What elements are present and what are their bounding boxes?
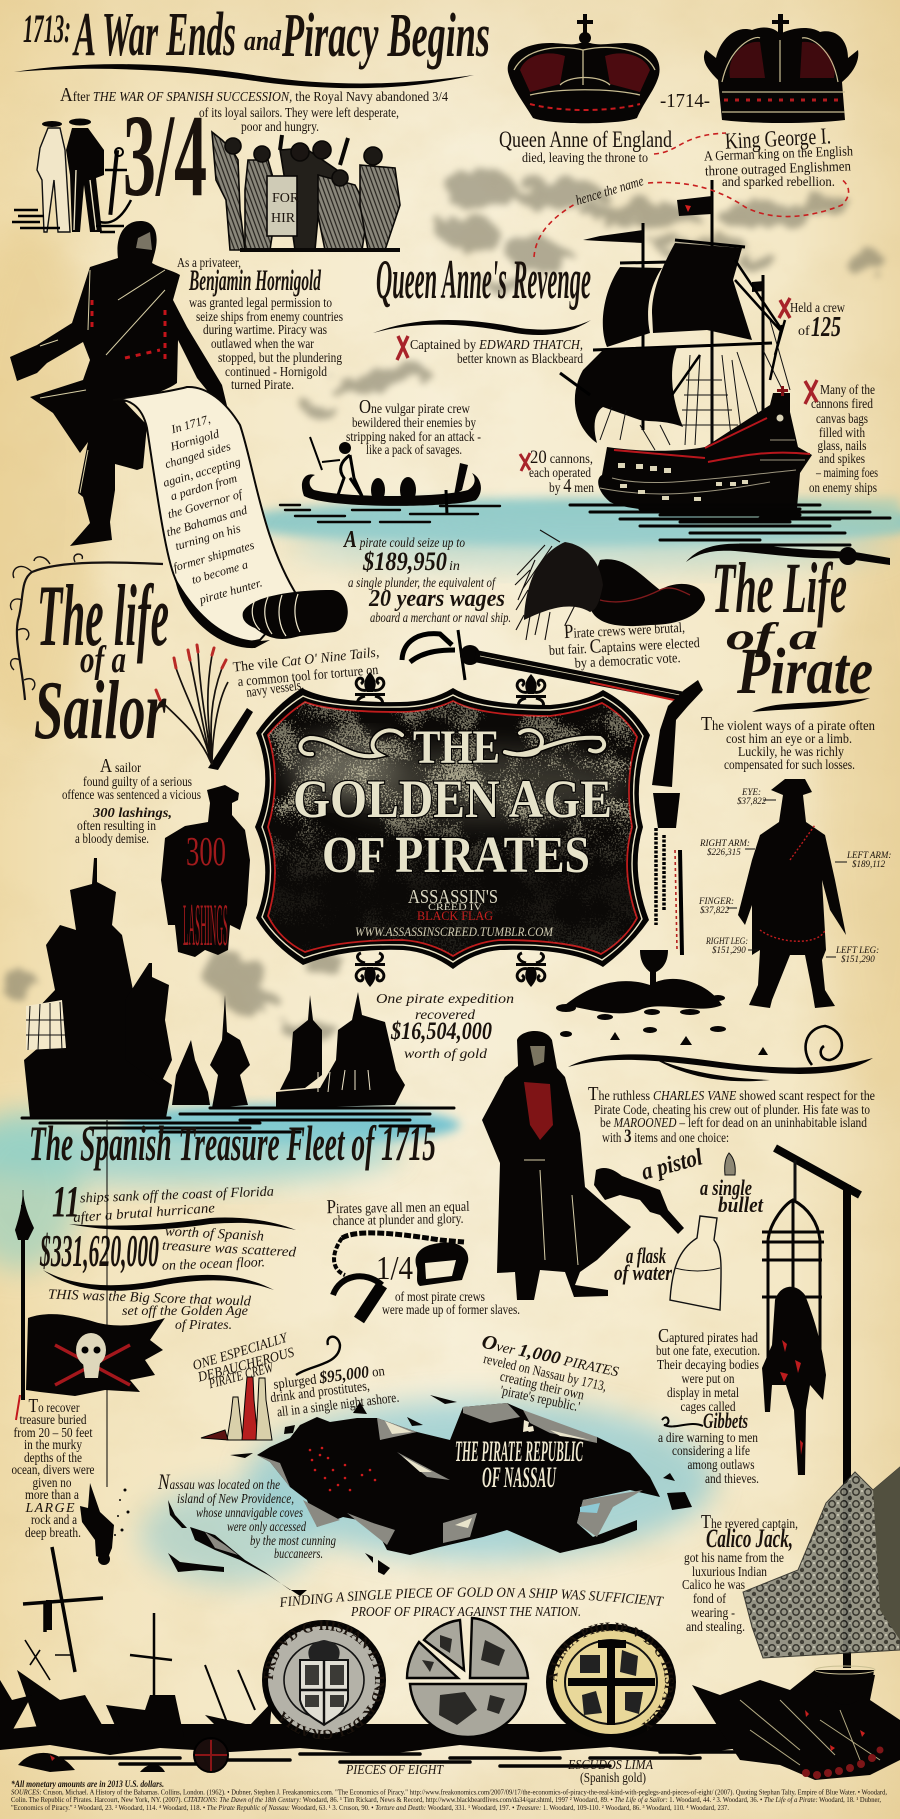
callout: held a crew of 125: 125	[811, 312, 841, 343]
text: former slaves	[382, 1290, 520, 1318]
icon: shackles with 1/4: 1/4	[376, 1250, 413, 1287]
text: King George I: King George I.	[724, 123, 832, 154]
text: vulgar pirate crew: like a pack of savages.	[366, 443, 462, 458]
illustration: sailors for hire: HIR	[271, 211, 296, 226]
footer: sources and citations: *All monetary amounts are in 2013 U.S. dollars.	[11, 1779, 164, 1789]
heading: The Life of a Pirate: Pirate	[736, 635, 873, 708]
panel: Hornigold biography: outlawed when the war	[211, 337, 314, 352]
text: captured pirates gibbets: cages called	[680, 1400, 736, 1415]
icon: diver	[80, 1483, 130, 1565]
callout: canvas bags: glass, nails	[818, 439, 866, 454]
heading: The life of a Sailor: of a	[80, 639, 126, 681]
text: Calico Jack: wearing -	[691, 1606, 735, 1621]
text: to recover treasure	[12, 1395, 94, 1541]
labels: price of body parts: $226,315	[707, 847, 741, 857]
text: captured pirates gibbets: display in metal	[667, 1386, 739, 1401]
text: Charles Vane marooned	[588, 1083, 875, 1147]
title: 1713	[14, 1, 490, 88]
panel: Golden Age sign: BLACK FLAG	[417, 908, 493, 923]
text: the Big Score: set off the Golden Age	[122, 1304, 248, 1319]
text: pirate could seize: A pirate could seize up to	[342, 527, 465, 553]
text: pirate could seize: 20 years wages	[368, 586, 505, 612]
callout: canvas bags: filled with	[819, 426, 865, 441]
text: Calico Jack	[682, 1511, 798, 1635]
clouds and sea washes	[0, 168, 900, 1585]
text: the Big Score: THIS was the Big Score that would	[48, 1287, 252, 1310]
callout: captained by Edward Thatch: Captained by EDWARD THATCH,	[410, 338, 583, 353]
text: over 1000 pirates: reveled on Nassau by 1713,	[482, 1352, 608, 1395]
scroll: In 1717,	[169, 412, 212, 437]
text: single piece of gold	[280, 1588, 664, 1620]
big fraction 3/4: 3/4	[123, 90, 207, 221]
labels: price of body parts: EYE:	[741, 787, 761, 797]
text: vulgar pirate crew: One vulgar pirate crew	[359, 396, 471, 418]
map: Pirate Republic of Nassau	[230, 1395, 692, 1575]
text: Calico Jack: Calico he was	[682, 1578, 745, 1593]
text: captured pirates gibbets: Their decaying bodies	[657, 1358, 759, 1373]
figure: Benjamin Hornigold	[10, 221, 228, 546]
text: cat o' nine tails: The vile Cat O' Nine Tails,	[232, 645, 380, 676]
scroll: turning on his	[173, 521, 242, 553]
text: violent ways: Luckily, he was richly	[738, 745, 844, 760]
text: pirate expedition: recovered	[415, 1008, 476, 1023]
text: war of Spanish succession	[60, 84, 448, 135]
panel: Hornigold biography: was granted legal permission to	[189, 296, 332, 311]
text: Queen Anne's Revenge	[376, 249, 591, 311]
panel: Golden Age sign	[250, 688, 660, 970]
text: captured pirates gibbets: Gibbets	[703, 1408, 748, 1433]
title: 1713: Piracy Begins	[281, 2, 490, 70]
coin captions: PIECES OF EIGHT	[345, 1763, 444, 1778]
text: King George I: throne outraged Englishmen	[705, 159, 851, 180]
text: captured pirates gibbets	[656, 1325, 760, 1487]
text: pirate expedition: One pirate expedition	[376, 992, 514, 1007]
text: former slaves: were made up of former slaves.	[382, 1303, 520, 1318]
text: equal chance: Pirates gave all men an equal	[326, 1194, 470, 1218]
text: vulgar pirate crew: bewildered their enemies by	[352, 416, 476, 431]
scroll: former shipmates	[172, 538, 256, 574]
illustration: sailors for hire	[212, 132, 400, 250]
icon: cut coin pieces	[407, 1618, 528, 1737]
callout: 20 cannons: each operated	[529, 466, 591, 481]
text: eleven ships: 11	[52, 1177, 80, 1226]
labels: price of body parts: LEFT LEG:	[835, 945, 879, 955]
text: Nassau location	[157, 1469, 336, 1562]
map: Pirate Republic of Nassau: THE PIRATE REPUBLIC	[455, 1435, 583, 1468]
panel: Golden Age sign: OF PIRATES	[322, 827, 590, 884]
text: to recover treasure: treasure buried	[20, 1413, 86, 1428]
ornaments below sign	[355, 953, 546, 987]
text: 300 lashes: found guilty of a serious	[83, 775, 192, 790]
text: to recover treasure: deep breath.	[25, 1526, 81, 1541]
icon: shackles with 1/4	[333, 1233, 468, 1320]
text: 331 million: $331,620,000	[40, 1225, 159, 1276]
text: Calico Jack: fond of	[693, 1592, 726, 1607]
panel: Hornigold biography: stopped, but the plundering	[218, 351, 342, 366]
callout: 20 cannons: 20 cannons,	[530, 447, 593, 468]
text: King George I	[704, 123, 853, 190]
text: pirate could seize: a single plunder, the equivalent of	[348, 576, 497, 591]
text: Queen Anne of England: Queen Anne of England	[499, 127, 672, 152]
calico fabric	[743, 1467, 900, 1658]
map: New Providence isles	[168, 1500, 307, 1596]
footer: sources and citations	[11, 1779, 887, 1812]
scroll: to become a	[190, 557, 250, 587]
text: Nassau location: whose unnavigable coves	[196, 1506, 303, 1521]
scroll	[113, 387, 348, 648]
text: debaucherous crew: drink and prostitutes,	[270, 1379, 371, 1406]
text: pirate crews brutal: but fair. Captains were elected	[548, 630, 700, 660]
text: 331 million: on the ocean floor.	[162, 1255, 265, 1274]
title: 1713: A War Ends	[72, 1, 236, 69]
callout: canvas bags: on enemy ships	[809, 481, 877, 496]
icon: bottles	[201, 1377, 272, 1440]
shipwreck ground	[0, 1547, 900, 1772]
title: 1713: and	[244, 26, 282, 57]
heading: The Life of a Pirate	[712, 548, 873, 712]
text: Charles Vane marooned: The ruthless CHARLES VANE showed scant respect for the	[588, 1083, 875, 1105]
scroll: a pardon from	[169, 471, 239, 503]
text: pirate could seize: in	[449, 559, 460, 574]
panel: Golden Age sign: GOLDEN AGE	[293, 769, 612, 829]
scroll: changed sides	[163, 439, 232, 471]
illustration: Queen Anne's Revenge ship	[560, 180, 890, 545]
text: Calico Jack: Calico Jack,	[706, 1524, 793, 1553]
labels: price of body parts	[698, 787, 891, 964]
scroll: pirate hunter.	[197, 575, 264, 607]
treasure pile bottom right	[692, 1666, 900, 1780]
text: captured pirates gibbets: among outlaws	[688, 1458, 754, 1473]
illustration: sailors for hire: FOR	[272, 191, 300, 206]
text: 300 lashes: a bloody demise.	[75, 832, 149, 847]
text: to recover treasure: ocean, divers were	[12, 1463, 94, 1478]
text: eleven ships: ships sank off the coast of Florida	[80, 1185, 274, 1206]
text: captured pirates gibbets: were put on	[682, 1372, 734, 1387]
text: Calico Jack: luxurious Indian	[692, 1565, 767, 1580]
text: pirate expedition: worth of gold	[404, 1047, 488, 1062]
illustration: treasure fleet	[22, 858, 454, 1132]
figure: tattooed treasure pirate	[738, 779, 846, 1008]
text: over 1000 pirates: Over 1,000 PIRATES	[480, 1331, 621, 1381]
labels: price of body parts: $151,290	[841, 954, 875, 964]
footer: sources and citations: "Economics of Piracy." ² Woodard, 23. ³ Woodard, 114. ⁴ Woodard, 118. • The Pirate Republic of Nassau: Woodard, 63. ¹ 3. Cruson, 90. • Torture and Death: Woodard, 331. ¹ Woodard, 197. • Treasure: 1. Woodard, 109-110. ² Woodard, 86. ³ Woodard, 110. ⁴ Woodard, 237.	[11, 1803, 729, 1812]
text: 331 million: treasure was scattered	[162, 1239, 297, 1261]
text: war of Spanish succession: After THE WAR OF SPANISH SUCCESSION, the Royal Navy abandoned 3/4	[60, 84, 448, 106]
text: captured pirates gibbets: considering a life	[672, 1444, 750, 1459]
text: vulgar pirate crew	[346, 396, 481, 458]
text: the Big Score: of Pirates.	[175, 1318, 232, 1333]
text: over 1000 pirates	[480, 1331, 621, 1415]
icon: two sailors and anchor	[12, 118, 131, 232]
text: Nassau location: buccaneers.	[274, 1547, 323, 1562]
figure: whipped sailor: 300	[186, 829, 226, 874]
text: pirate crews brutal: by a democratic vote.	[574, 651, 681, 672]
text: pirate crews brutal	[547, 614, 701, 673]
panel: Golden Age sign: CREED IV	[428, 903, 482, 913]
icon: feathered hat	[515, 530, 705, 640]
panel: Golden Age sign: THE	[413, 721, 500, 774]
text: to recover treasure: in the murky	[24, 1438, 82, 1453]
text: to recover treasure: from 20 – 50 feet	[14, 1426, 93, 1441]
text: war of Spanish succession: poor and hungry.	[241, 120, 319, 135]
map: Pirate Republic of Nassau: OF NASSAU	[482, 1461, 557, 1494]
text: debaucherous crew: splurged $95,000 on	[272, 1360, 386, 1393]
text: The life	[37, 568, 169, 665]
text: over 1000 pirates: 'pirate's republic.'	[499, 1384, 581, 1415]
text: pirate could seize: aboard a merchant or naval ship.	[370, 611, 511, 626]
sword across sign	[402, 630, 703, 787]
text: captured pirates gibbets: and thieves.	[705, 1472, 759, 1487]
labels: price of body parts: $151,290	[712, 945, 746, 955]
text: single piece of gold: FINDING A SINGLE PIECE OF GOLD ON A SHIP WAS SUFFICIENT	[280, 1588, 664, 1607]
text: over 1000 pirates: creating their own	[498, 1370, 585, 1403]
panel: Golden Age sign: ASSASSIN'S	[408, 886, 498, 908]
panel: Hornigold biography: As a privateer,	[177, 256, 241, 271]
callout: captained by Edward Thatch: better known as Blackbeard	[457, 352, 583, 367]
swash with curl	[568, 1054, 873, 1081]
panel: Hornigold biography: seize ships from enemy countries	[196, 310, 343, 325]
label: 1714: -1714-	[660, 90, 710, 112]
callout: held a crew of 125: of	[798, 324, 810, 339]
text: Nassau location: island of New Providence,	[177, 1492, 294, 1507]
text: debaucherous crew: ONE ESPECIALLY	[191, 1330, 291, 1374]
text: to recover treasure: depths of the	[24, 1451, 82, 1466]
text: 331 million: worth of Spanish	[165, 1224, 264, 1245]
text: 300 lashes	[62, 755, 201, 847]
items: pistol, bullet, flask: a single	[700, 1175, 752, 1200]
text: to recover treasure: more than a	[25, 1488, 80, 1503]
text: pirate could seize	[342, 527, 511, 626]
text: pirate expedition: $16,504,000	[390, 1018, 492, 1045]
callout: canvas bags: canvas bags	[816, 412, 868, 427]
text: the Big Score	[48, 1287, 252, 1333]
text: Nassau location: Nassau was located on the	[157, 1469, 280, 1494]
text: captured pirates gibbets: a dire warning to men	[658, 1431, 758, 1446]
text: captured pirates gibbets: but one fate, execution.	[656, 1344, 760, 1359]
coin captions: (Spanish gold)	[580, 1771, 646, 1786]
text: cat o' nine tails: a common tool for torture on	[237, 663, 379, 690]
text: eleven ships: after a brutal hurricane	[73, 1201, 215, 1226]
labels: price of body parts: RIGHT ARM:	[699, 838, 750, 848]
text: violent ways	[701, 713, 875, 773]
text: debaucherous crew: PIRATE CREW	[207, 1360, 276, 1392]
items: pistol, bullet, flask: a pistol	[639, 1144, 706, 1186]
ornaments above sign	[355, 672, 546, 708]
text: debaucherous crew: all in a single night ashore.	[276, 1391, 400, 1420]
callout: captained by Edward Thatch	[397, 336, 583, 367]
text: cat o' nine tails: navy vessels.	[245, 678, 305, 701]
text: pirate crews brutal: Pirate crews were brutal,	[563, 615, 685, 643]
items: pistol, bullet, flask	[594, 1144, 764, 1310]
text: single piece of gold: PROOF OF PIRACY AGAINST THE NATION.	[350, 1605, 581, 1620]
text: to recover treasure: rock and a	[31, 1513, 78, 1528]
scroll: Hornigold	[168, 426, 222, 454]
red dashed route: hence the name	[534, 133, 849, 257]
text: equal chance	[326, 1194, 470, 1229]
icon: crown of Queen Anne	[508, 14, 660, 123]
panel: Hornigold biography	[177, 256, 343, 393]
text: Queen Anne of England: died, leaving the throne to	[522, 151, 648, 166]
heading: Queen Anne's Revenge	[373, 249, 591, 335]
text: eleven ships	[52, 1177, 296, 1230]
gibbet with cage	[762, 1148, 860, 1668]
labels: price of body parts: FINGER:	[698, 896, 734, 906]
goblet, beads and coin hoard	[556, 793, 768, 1055]
text: violent ways: compensated for such losses.	[724, 758, 855, 773]
text: pirate expedition	[376, 992, 514, 1062]
items: pistol, bullet, flask: of water	[614, 1260, 672, 1285]
callout: canvas bags: cannons fired	[811, 397, 873, 412]
labels: price of body parts: $37,822	[700, 905, 730, 915]
icon: crown of King George	[704, 14, 858, 123]
items: pistol, bullet, flask: bullet	[718, 1192, 764, 1217]
curl of swash	[806, 1026, 842, 1065]
panel: Golden Age sign: WWW.ASSASSINSCREED.TUMBLR.COM	[355, 925, 554, 939]
text: 300 lashes: often resulting in	[77, 819, 156, 834]
text: cat o' nine tails	[232, 645, 380, 701]
text: to recover treasure: LARGE	[24, 1501, 75, 1516]
labels: price of body parts: $189,112	[852, 859, 886, 869]
figure: whipped sailor	[161, 785, 250, 959]
icon: cutlass	[686, 544, 890, 565]
title: 1713: 1713:	[23, 6, 71, 51]
callout: held a crew of 125: Held a crew	[790, 301, 846, 316]
text: 300 lashes: offence was sentenced a vicious	[62, 788, 201, 803]
vine ornament	[10, 554, 163, 700]
heading: The life of a Sailor: Sailor	[34, 664, 167, 757]
illustration: canoe of naked pirates	[280, 437, 500, 522]
text: 300 lashes: A sailor	[100, 755, 141, 777]
scroll: the Governor of	[166, 486, 245, 521]
heading: Spanish Treasure Fleet of 1715: The Spanish Treasure Fleet of 1715	[29, 1115, 436, 1171]
scroll: the Bahamas and	[165, 503, 250, 539]
text: captured pirates gibbets: Captured pirates had	[658, 1325, 758, 1347]
jolly roger flag with pole	[15, 1120, 165, 1487]
text: vulgar pirate crew: stripping naked for an attack -	[346, 430, 481, 445]
heading: The Life of a Pirate: of a	[726, 616, 818, 658]
text: 300 lashes: 300 lashings,	[92, 806, 172, 821]
scroll: again, accepting	[161, 454, 242, 490]
items: pistol, bullet, flask: a flask	[626, 1243, 666, 1268]
panel: Hornigold biography: continued - Hornigold	[225, 365, 327, 380]
text: King George I: A German king on the English	[704, 144, 853, 165]
icon: cat o' nine tails	[156, 645, 253, 770]
text: Nassau location: were only accessed	[227, 1520, 307, 1535]
coin captions	[345, 1758, 653, 1786]
text: debaucherous crew: DEBAUCHEROUS	[196, 1345, 296, 1386]
figure: whipped sailor: LASHINGS	[183, 892, 228, 959]
panel: Hornigold biography: during wartime. Piracy was	[203, 323, 327, 338]
text: King George I: and sparked rebellion.	[722, 175, 835, 190]
labels: price of body parts: $37,822	[737, 796, 767, 806]
text: to recover treasure: To recover	[28, 1395, 80, 1417]
heading: The life of a Sailor	[34, 568, 169, 757]
callout: canvas bags	[805, 380, 878, 496]
callout: 20 cannons: by 4 men	[549, 475, 594, 497]
text: former slaves: of most pirate crews	[395, 1290, 485, 1305]
text: Calico Jack: and stealing.	[686, 1620, 745, 1635]
text: equal chance: chance at plunder and glory.	[332, 1212, 464, 1229]
callout: canvas bags: and spikes	[819, 452, 865, 467]
text: violent ways: The violent ways of a pirate often	[701, 713, 875, 735]
panel: Hornigold biography: turned Pirate.	[231, 378, 294, 393]
text: Nassau location: by the most cunning	[250, 1534, 336, 1549]
text: Charles Vane marooned: with 3 items and one choice:	[602, 1126, 729, 1147]
coin captions: ESCUDOS LIMA	[567, 1758, 653, 1773]
text: war of Spanish succession: of its loyal sailors. They were left desperate,	[199, 106, 399, 121]
text: to recover treasure: given no	[32, 1476, 72, 1491]
labels: price of body parts: LEFT ARM:	[846, 850, 891, 860]
callout: held a crew of 125	[779, 298, 846, 343]
panel: Hornigold biography: Benjamin Hornigold	[188, 264, 322, 297]
labels: price of body parts: RIGHT LEG:	[705, 936, 748, 946]
text: violent ways: cost him an eye or a limb.	[726, 732, 852, 747]
footer: sources and citations: Colin. The Republic of Pirates. Harcourt, New York, NY. (2007). CITATIONS: The Dawn of the 18th Century: Woodard, 86. ¹ Tim Rickard, News & Record, http://www.blackbeardlives.com/da34/qar.shtml, 1997 ² Woodard, 89. • The Life of a Sailor: 1. Woodard, 44. ² 3. Woodard, 36. • The Life of a Pirate: Woodard, 18. ¹ Dubner,	[11, 1795, 881, 1804]
callout: 20 cannons	[520, 447, 594, 497]
text: Calico Jack: got his name from the	[684, 1551, 784, 1566]
text: Queen Anne of England	[499, 127, 672, 166]
text: debaucherous crew	[191, 1330, 400, 1420]
figure: Charles Vane	[482, 1031, 631, 1300]
text: Calico Jack: The revered captain,	[701, 1511, 798, 1533]
icon: escudos lima gold coin: A·LIMA·PHILIP·V·D·G·HISPA·REX	[548, 1622, 674, 1730]
red dashed route: hence the name: hence the name	[574, 174, 646, 209]
text: pirate could seize: $189,950	[362, 547, 447, 576]
callout: canvas bags: Many of the	[820, 383, 875, 398]
icon: piece of eight coin: FRD·VD·G·HISPAN·ET·IND·R·DEI·GRATIA	[264, 1621, 384, 1739]
